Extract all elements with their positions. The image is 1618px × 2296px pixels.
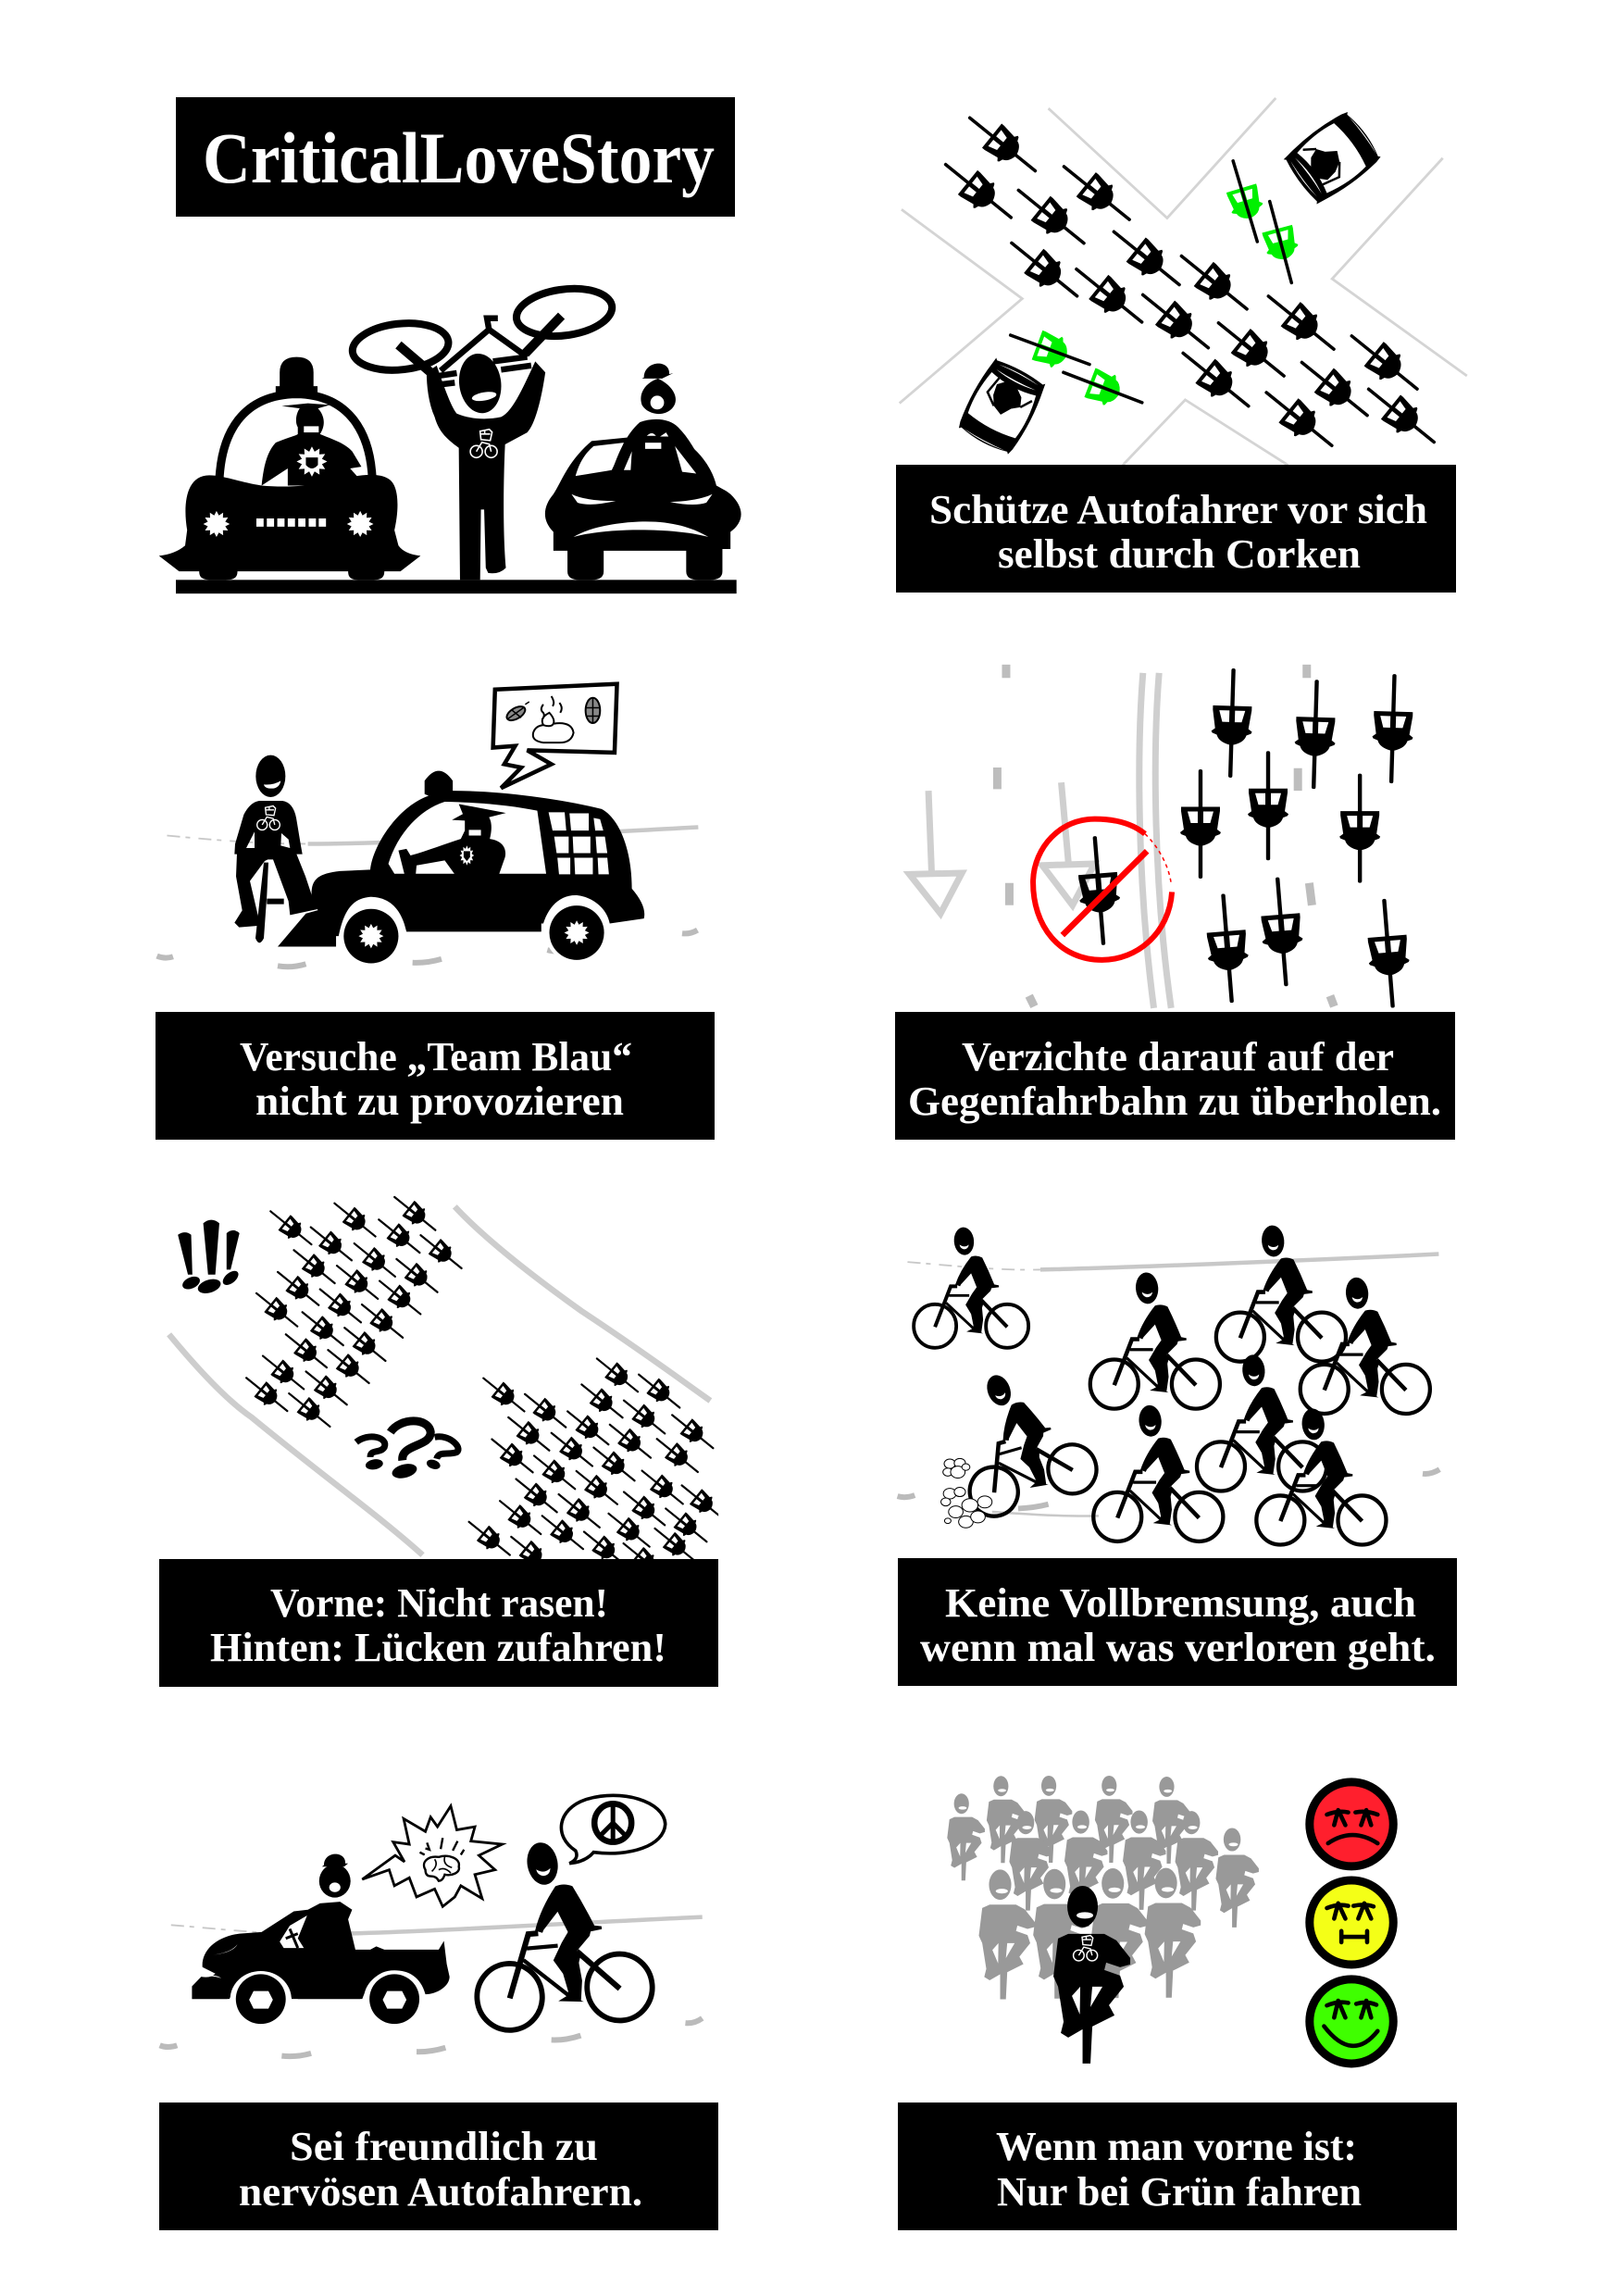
illustration: angry motorist and calm cyclist [160,1795,703,2056]
caption: be friendly: Sei freundlich zu [290,2124,598,2169]
caption: no overtaking [895,1012,1455,1140]
road markings [171,1925,308,1934]
panel: title and road scene [159,97,741,593]
car top right [1281,108,1384,207]
panel: be friendly [159,1795,718,2230]
leading rider [1053,1886,1130,2064]
speech bubble with peace sign [561,1795,666,1864]
caption: close the gaps: Hinten: Lücken zufahren! [210,1625,666,1670]
illustration: cyclists with one braking hard [898,1225,1439,1545]
title banner: CriticalLoveStory [203,118,715,198]
title banner [176,97,735,217]
illustration: bikes and oncoming lane [910,665,1415,1009]
braking cyclist [940,1354,1102,1522]
red smiley [1310,1782,1393,1866]
green corking bikes [1003,155,1308,418]
panel: close the gaps [159,1189,751,1687]
illustration: police van and cyclist [157,684,698,967]
caption: corking: selbst durch Corken [998,531,1361,577]
caption: be friendly [159,2103,718,2230]
cyclist [464,1832,655,2033]
panel: no emergency braking [898,1225,1457,1686]
caption: corking: Schütze Autofahrer vor sich [929,487,1427,532]
ground bar [176,580,737,593]
bike group [1180,668,1415,1009]
panel: team blau [156,684,715,1140]
illustration: corked intersection from above [900,98,1467,465]
caption: only on green: Nur bei Grün fahren [997,2169,1362,2215]
cyclist holding bike overhead [349,282,616,580]
police van [278,771,644,967]
exclamation marks [178,1220,242,1296]
illustration: group behind leader and traffic light smileys [947,1776,1393,2064]
caption: no emergency braking: Keine Vollbremsung, auch [945,1580,1416,1626]
caption: be friendly: nervösen Autofahrern. [239,2169,642,2215]
caption: corking [896,465,1456,593]
explosion speech bubble with brain [362,1806,503,1906]
caption: close the gaps [159,1559,718,1687]
caption: only on green: Wenn man vorne ist: [996,2124,1357,2169]
caption: close the gaps: Vorne: Nicht rasen! [270,1580,608,1626]
gray riders group [947,1776,1259,1999]
caption: team blau: nicht zu provozieren [255,1079,624,1124]
caption: only on green [898,2103,1457,2230]
car bottom left [954,356,1049,457]
lost items clouds [941,1458,992,1528]
prohibited overtaking bike [1033,819,1172,960]
green smiley [1310,1979,1393,2064]
caption: team blau [156,1012,715,1140]
road markings [907,1262,1040,1270]
caption: no overtaking: Verzichte darauf auf der [962,1034,1394,1079]
caption: no overtaking: Gegenfahrbahn zu überholen. [908,1079,1441,1124]
cyclist front view [234,755,319,942]
front bike group [239,1189,468,1435]
road edges [900,98,1467,465]
convertible and motorist [192,1854,450,2028]
question marks [356,1421,458,1481]
rear bike group [462,1350,751,1585]
illustration: split bike group [169,1189,751,1585]
motorist in car [545,364,741,580]
road lines and arrows [910,665,1334,1008]
caption: no emergency braking [898,1558,1457,1686]
caption: team blau: Versuche „Team Blau“ [240,1034,632,1079]
yellow smiley [1310,1880,1393,1965]
bike group crossing [934,105,1446,459]
panel: no overtaking [895,665,1455,1140]
panel: corking [896,98,1467,593]
road edges [169,1206,710,1555]
speech bubble: insults [493,684,617,788]
road markings [157,828,698,967]
cyclists riding [914,1225,1430,1545]
panel: only on green [898,1776,1457,2230]
illustration: police car, cyclist lifting bike, motorist [159,282,741,593]
police car with officer [159,357,420,580]
caption: no emergency braking: wenn mal was verloren geht. [920,1625,1436,1670]
